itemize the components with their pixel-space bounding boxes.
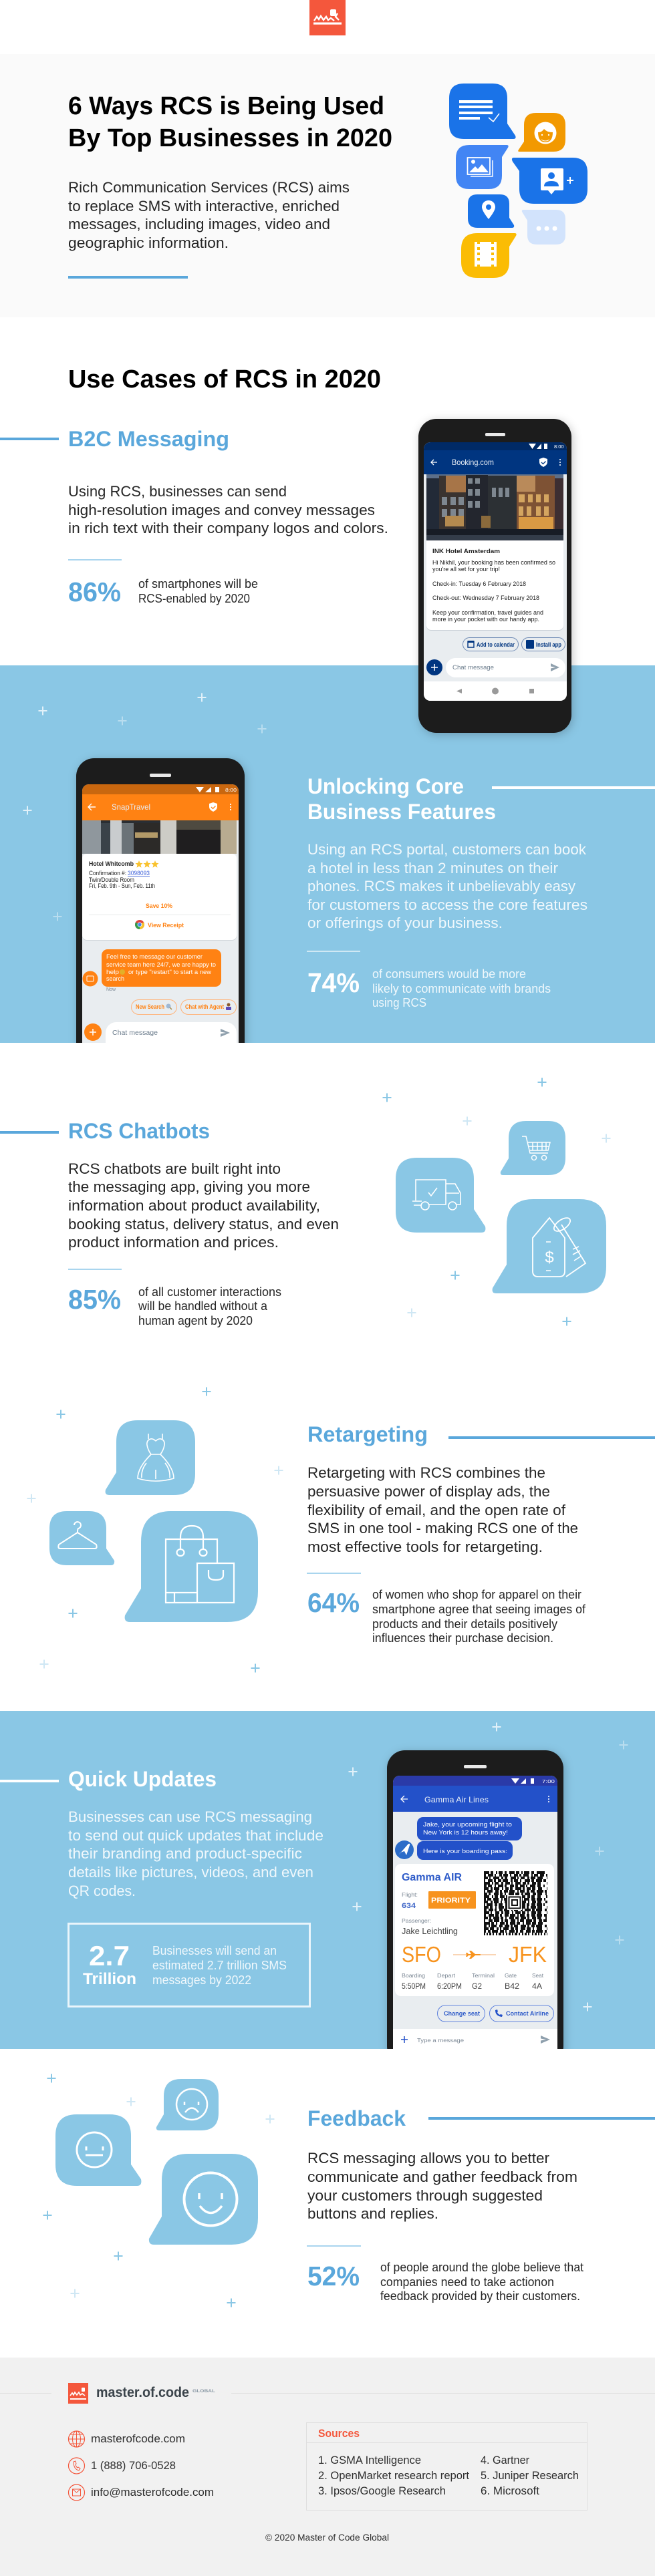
icon: price tag bubble bbox=[493, 1199, 606, 1293]
logo: master of code: master.of.code bbox=[96, 2385, 189, 2400]
panel: blue band one bbox=[0, 665, 655, 1043]
callout: 2.7 trillion: Businesses will send an bbox=[152, 1943, 277, 1957]
stat caption: of consumers would be more bbox=[372, 967, 526, 981]
stat: 64%: 64% bbox=[307, 1587, 360, 1618]
icon: price tag bubble: $ bbox=[545, 1249, 554, 1267]
title bbox=[68, 92, 392, 152]
logo: master of code bbox=[68, 2383, 215, 2404]
callout: 2.7 trillion bbox=[68, 1924, 310, 2007]
body text: Retargeting with RCS combines the bbox=[307, 1464, 545, 1481]
callout: 2.7 trillion: Trillion bbox=[83, 1970, 136, 1988]
phone: Booking.com: INK Hotel Amsterdam bbox=[432, 548, 500, 554]
body text: persuasive power of display ads, the bbox=[307, 1483, 550, 1500]
heading bbox=[307, 774, 496, 824]
phone: SnapTravel: search bbox=[106, 975, 124, 982]
contact: email: info@masterofcode.com bbox=[91, 2486, 214, 2499]
phone: Gamma Air Lines: Contact Airline bbox=[506, 2010, 549, 2017]
phone: Booking.com bbox=[418, 419, 571, 733]
phone: Gamma Air Lines: 5:50PM bbox=[402, 1981, 426, 1991]
phone: SnapTravel: or type "restart" to start a new bbox=[128, 969, 212, 975]
phone: Gamma Air Lines: Jake, your upcoming flight to bbox=[423, 1821, 512, 1828]
stat caption: will be handled without a bbox=[138, 1299, 268, 1313]
icon: sad face bubble bbox=[156, 2079, 219, 2130]
stat: 85%: 85% bbox=[68, 1284, 121, 1315]
heading: Feedback bbox=[307, 2106, 406, 2130]
contact: phone bbox=[68, 2458, 176, 2474]
body text: their branding and product-specific bbox=[68, 1845, 302, 1862]
body text: buttons and replies. bbox=[307, 2205, 438, 2222]
body text: booking status, delivery status, and even bbox=[68, 1216, 339, 1233]
phone: Booking.com: Check-out: Wednesday 7 February 2018 bbox=[432, 595, 539, 601]
contact: website: masterofcode.com bbox=[91, 2432, 185, 2445]
stat caption: of all customer interactions bbox=[138, 1285, 281, 1299]
phone: Booking.com: Booking.com bbox=[452, 458, 494, 467]
heading: B2C Messaging bbox=[68, 427, 229, 451]
icon: location pin bubble bbox=[468, 194, 514, 228]
panel: B2C messaging bbox=[0, 427, 388, 607]
body text: a hotel in less than 2 minutes on their bbox=[307, 860, 558, 876]
logo: master of code: GLOBAL bbox=[192, 2390, 215, 2394]
body text: details like pictures, videos, and even bbox=[68, 1864, 313, 1881]
stat caption: of women who shop for apparel on their bbox=[372, 1587, 581, 1601]
contact: website bbox=[68, 2431, 185, 2447]
icon: contact bubble bbox=[512, 158, 587, 204]
body text: Using RCS, businesses can send bbox=[68, 483, 287, 500]
title: 6 Ways RCS is Being Used bbox=[68, 92, 384, 120]
stat caption bbox=[380, 2260, 583, 2303]
panel: quick updates bbox=[0, 1767, 323, 2007]
panel: footer bbox=[0, 2358, 655, 2576]
panel: sources: 2. OpenMarket research report bbox=[318, 2469, 469, 2482]
phone: SnapTravel: Save 10% bbox=[146, 903, 172, 909]
panel: sources: Sources bbox=[318, 2427, 360, 2440]
divider accent bbox=[68, 276, 188, 279]
icon: dress bubble bbox=[106, 1420, 195, 1495]
stat: 74%: 74% bbox=[307, 967, 360, 998]
phone: Booking.com: Chat message bbox=[452, 664, 494, 671]
body text: high-resolution images and convey messages bbox=[68, 502, 375, 518]
stat caption: of smartphones will be bbox=[138, 577, 258, 591]
panel: sources bbox=[306, 2422, 587, 2511]
icon: film bubble bbox=[461, 233, 517, 278]
phone: Gamma Air Lines: G2 bbox=[472, 1981, 482, 1991]
stat caption: RCS-enabled by 2020 bbox=[138, 591, 250, 605]
phone: Gamma Air Lines: Boarding bbox=[402, 1973, 425, 1979]
panel: unlocking core business features bbox=[307, 774, 655, 1009]
icon: cart bubble bbox=[501, 1121, 565, 1175]
phone: SnapTravel: Twin/Double Room bbox=[89, 876, 134, 883]
body text: QR codes. bbox=[68, 1883, 136, 1899]
phone: SnapTravel: Chat message bbox=[112, 1029, 158, 1037]
body text bbox=[307, 2150, 577, 2222]
phone: Gamma Air Lines: B42 bbox=[505, 1981, 519, 1991]
body text: in rich text with their company logos and colors. bbox=[68, 520, 388, 536]
callout: 2.7 trillion: messages by 2022 bbox=[152, 1973, 251, 1987]
phone: SnapTravel: service team here 24/7, we are happy to bbox=[106, 961, 216, 968]
body text bbox=[307, 841, 587, 931]
phone: Booking.com: Install app bbox=[536, 641, 561, 648]
intro text: geographic information. bbox=[68, 234, 229, 251]
phone: Gamma Air Lines: New York is 12 hours away! bbox=[423, 1829, 508, 1836]
icon: hanger bubble bbox=[49, 1511, 114, 1565]
callout: 2.7 trillion: estimated 2.7 trillion SMS bbox=[152, 1958, 287, 1972]
panel: sources: 3. Ipsos/Google Research bbox=[318, 2484, 446, 2497]
callout: 2.7 trillion: 2.7 bbox=[89, 1940, 130, 1971]
stat caption: human agent by 2020 bbox=[138, 1313, 253, 1327]
body text: Using an RCS portal, customers can book bbox=[307, 841, 587, 858]
icon: truck bubble bbox=[396, 1158, 485, 1233]
icon: shopping bags bubble bbox=[125, 1511, 258, 1622]
phone: Gamma Air Lines: Gate bbox=[505, 1973, 517, 1979]
phone: SnapTravel: Now bbox=[106, 987, 116, 992]
body text: to send out quick updates that include bbox=[68, 1827, 323, 1844]
panel: sources: 5. Juniper Research bbox=[481, 2469, 579, 2482]
stat caption: of people around the globe believe that bbox=[380, 2260, 583, 2274]
phone: Gamma Air Lines: JFK bbox=[509, 1943, 547, 1967]
panel: sources: 4. Gartner bbox=[481, 2454, 529, 2466]
icon: happy face bubble bbox=[149, 2154, 258, 2245]
body text: SMS in one tool - making RCS one of the bbox=[307, 1520, 578, 1537]
phone: Gamma Air Lines: Change seat bbox=[444, 2010, 480, 2017]
stat caption: companies need to take actionon bbox=[380, 2275, 554, 2289]
phone: Gamma Air Lines: 6:20PM bbox=[437, 1981, 462, 1991]
stat caption bbox=[372, 1587, 586, 1645]
heading: Quick Updates bbox=[68, 1767, 217, 1791]
body text bbox=[68, 1160, 339, 1251]
phone: Gamma Air Lines: Seat bbox=[532, 1973, 544, 1979]
panel: sources: 6. Microsoft bbox=[481, 2484, 539, 2497]
phone: SnapTravel bbox=[76, 758, 245, 1066]
body text: information about product availability, bbox=[68, 1197, 320, 1214]
heading: Business Features bbox=[307, 800, 496, 824]
phone: Gamma Air Lines: 4A bbox=[532, 1981, 542, 1991]
intro text bbox=[68, 179, 350, 251]
phone: SnapTravel: Fri, Feb. 9th - Sun, Feb. 11th bbox=[89, 882, 155, 889]
stat caption bbox=[372, 967, 551, 1009]
heading: Unlocking Core bbox=[307, 774, 464, 798]
body text: RCS chatbots are built right into bbox=[68, 1160, 281, 1177]
phone: SnapTravel: View Receipt bbox=[148, 922, 184, 929]
phone: Gamma Air Lines: Type a message bbox=[417, 2038, 465, 2044]
hotel photo bbox=[426, 474, 563, 540]
phone: SnapTravel: Hotel Whitcomb bbox=[89, 860, 134, 867]
heading: RCS Chatbots bbox=[68, 1119, 210, 1143]
phone: Gamma Air Lines: Depart bbox=[437, 1973, 456, 1979]
hotel photo bbox=[82, 820, 237, 854]
icon: typing bubble bbox=[522, 210, 565, 245]
panel: sources: 1. GSMA Intelligence bbox=[318, 2454, 421, 2466]
body text: flexibility of email, and the open rate of bbox=[307, 1502, 566, 1518]
stat caption: products and their details positively bbox=[372, 1617, 558, 1631]
phone: Booking.com: Keep your confirmation, travel guides and bbox=[432, 609, 543, 616]
phone: Booking.com: Check-in: Tuesday 6 February 2018 bbox=[432, 581, 526, 587]
phone: SnapTravel: Confirmation #: bbox=[89, 870, 126, 876]
icon: document bubble bbox=[449, 84, 516, 139]
phone: Gamma Air Lines: Terminal bbox=[472, 1973, 495, 1979]
contact: email bbox=[68, 2484, 214, 2501]
phone: Booking.com: Hi Nikhil, your booking has been confirmed so bbox=[432, 559, 555, 566]
panel: feedback bbox=[307, 2106, 655, 2303]
phone: SnapTravel: New Search bbox=[136, 1003, 164, 1010]
heading: use cases: Use Cases of RCS in 2020 bbox=[68, 365, 381, 393]
phone: Gamma Air Lines: SFO bbox=[402, 1943, 441, 1967]
body text: product information and prices. bbox=[68, 1234, 279, 1251]
body text: for customers to access the core features bbox=[307, 897, 587, 913]
body text bbox=[68, 483, 388, 536]
stat caption: smartphone agree that seeing images of bbox=[372, 1602, 586, 1616]
body text: most effective tools for retargeting. bbox=[307, 1539, 543, 1555]
intro text: messages, including images, video and bbox=[68, 216, 330, 232]
body text: your customers through suggested bbox=[307, 2187, 543, 2204]
phone: Booking.com: you're all set for your trip! bbox=[432, 566, 500, 573]
icon: neutral face bubble bbox=[55, 2114, 141, 2186]
stat caption bbox=[138, 1285, 281, 1327]
phone: Gamma Air Lines: PRIORITY bbox=[431, 1897, 471, 1905]
panel: retargeting bbox=[307, 1422, 655, 1645]
body text: communicate and gather feedback from bbox=[307, 2168, 577, 2185]
panel: RCS chatbots bbox=[0, 1119, 339, 1327]
body text: Businesses can use RCS messaging bbox=[68, 1808, 312, 1825]
phone: SnapTravel: 3098093 bbox=[128, 870, 150, 876]
phone: Gamma Air Lines bbox=[387, 1750, 563, 2064]
phone: Booking.com: 8:00 bbox=[554, 444, 564, 450]
stat caption: influences their purchase decision. bbox=[372, 1631, 553, 1645]
body text: RCS messaging allows you to better bbox=[307, 2150, 550, 2166]
icon: message bubble cluster bbox=[449, 84, 587, 278]
body text: or offerings of your business. bbox=[307, 915, 503, 931]
panel: blue band two bbox=[0, 1711, 655, 2049]
stat caption bbox=[138, 577, 258, 605]
phone: Gamma Air Lines: 7:00 bbox=[542, 1778, 555, 1784]
phone: Gamma Air Lines: Jake Leichtling bbox=[402, 1926, 458, 1936]
phone: Gamma Air Lines: Gamma Air Lines bbox=[424, 1795, 489, 1804]
body text: phones. RCS makes it unbelievably easy bbox=[307, 878, 576, 895]
phone: Booking.com: more in your pocket with our handy app. bbox=[432, 616, 539, 623]
phone: Gamma Air Lines: 634 bbox=[402, 1902, 416, 1910]
phone: Booking.com: Add to calendar bbox=[477, 641, 515, 648]
intro text: to replace SMS with interactive, enriched bbox=[68, 198, 340, 214]
stat: 86%: 86% bbox=[68, 577, 121, 607]
phone: SnapTravel: 8:00 bbox=[225, 787, 237, 793]
phone: Gamma Air Lines: Flight: bbox=[402, 1892, 418, 1898]
body text: the messaging app, giving you more bbox=[68, 1178, 310, 1195]
body text bbox=[68, 1808, 323, 1899]
phone: Gamma Air Lines: Here is your boarding pass: bbox=[423, 1848, 507, 1855]
phone: SnapTravel: Chat with Agent bbox=[185, 1003, 224, 1010]
heading: Retargeting bbox=[307, 1422, 428, 1446]
phone: SnapTravel: help bbox=[106, 969, 119, 975]
body text bbox=[307, 1464, 578, 1555]
title: By Top Businesses in 2020 bbox=[68, 124, 392, 152]
stat caption: likely to communicate with brands bbox=[372, 981, 551, 995]
QR code bbox=[484, 1873, 547, 1934]
phone: Gamma Air Lines: Passenger: bbox=[402, 1918, 431, 1924]
stat caption: using RCS bbox=[372, 995, 426, 1009]
copyright: © 2020 Master of Code Global bbox=[265, 2532, 389, 2543]
phone: Gamma Air Lines: Gamma AIR bbox=[402, 1872, 462, 1883]
icon: image bubble bbox=[456, 145, 509, 189]
phone: SnapTravel: SnapTravel bbox=[112, 802, 150, 812]
intro text: Rich Communication Services (RCS) aims bbox=[68, 179, 350, 196]
stat caption: feedback provided by their customers. bbox=[380, 2289, 580, 2303]
icon: face bubble bbox=[518, 113, 565, 152]
phone: SnapTravel: Feel free to message our customer bbox=[106, 953, 203, 960]
stat: 52%: 52% bbox=[307, 2261, 360, 2291]
logo: top badge bbox=[309, 0, 346, 35]
panel: hero bbox=[0, 54, 655, 317]
contact: phone: 1 (888) 706-0528 bbox=[91, 2459, 176, 2472]
